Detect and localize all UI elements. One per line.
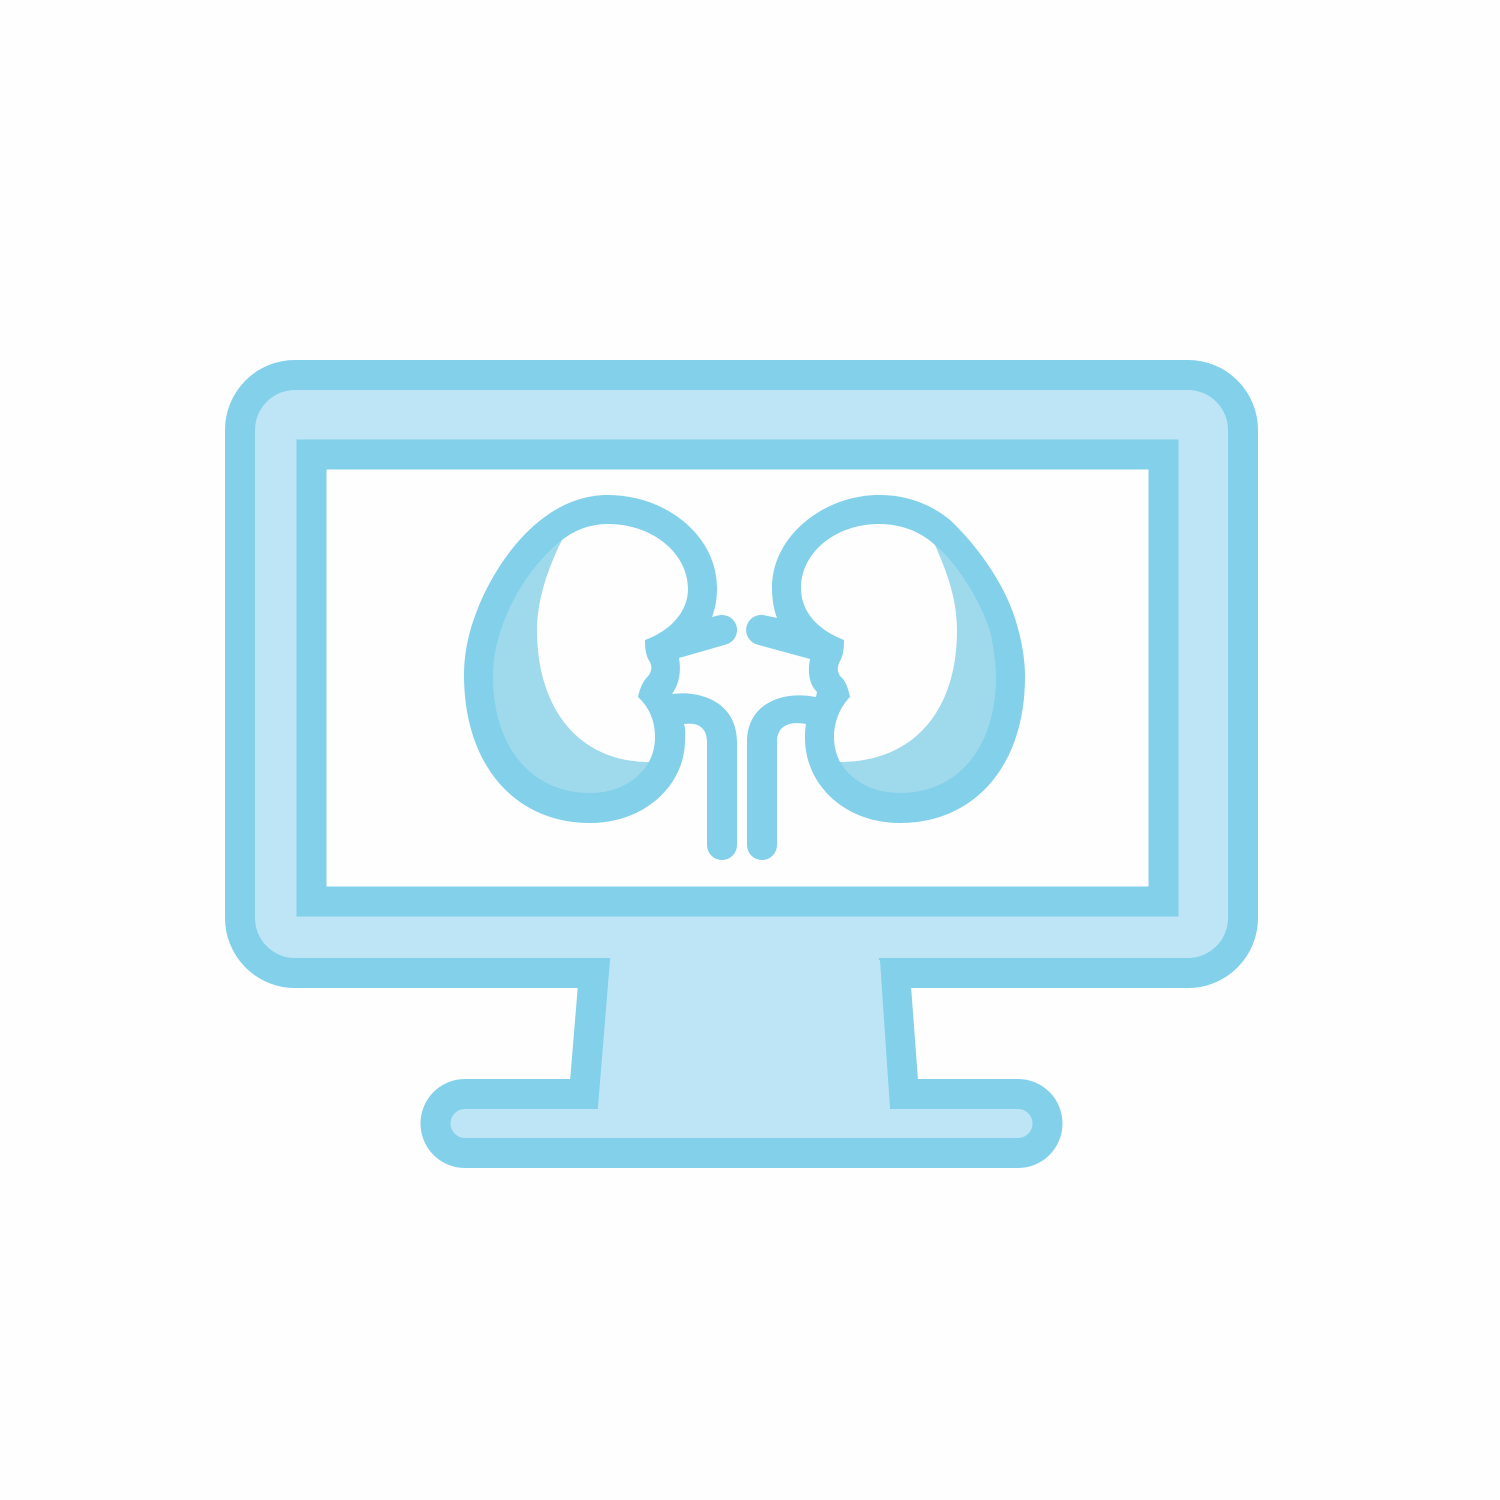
left kidney [464, 495, 737, 860]
monitor screen [312, 454, 1164, 902]
right kidney [746, 495, 1025, 860]
monitor body and stand [240, 375, 1243, 1153]
